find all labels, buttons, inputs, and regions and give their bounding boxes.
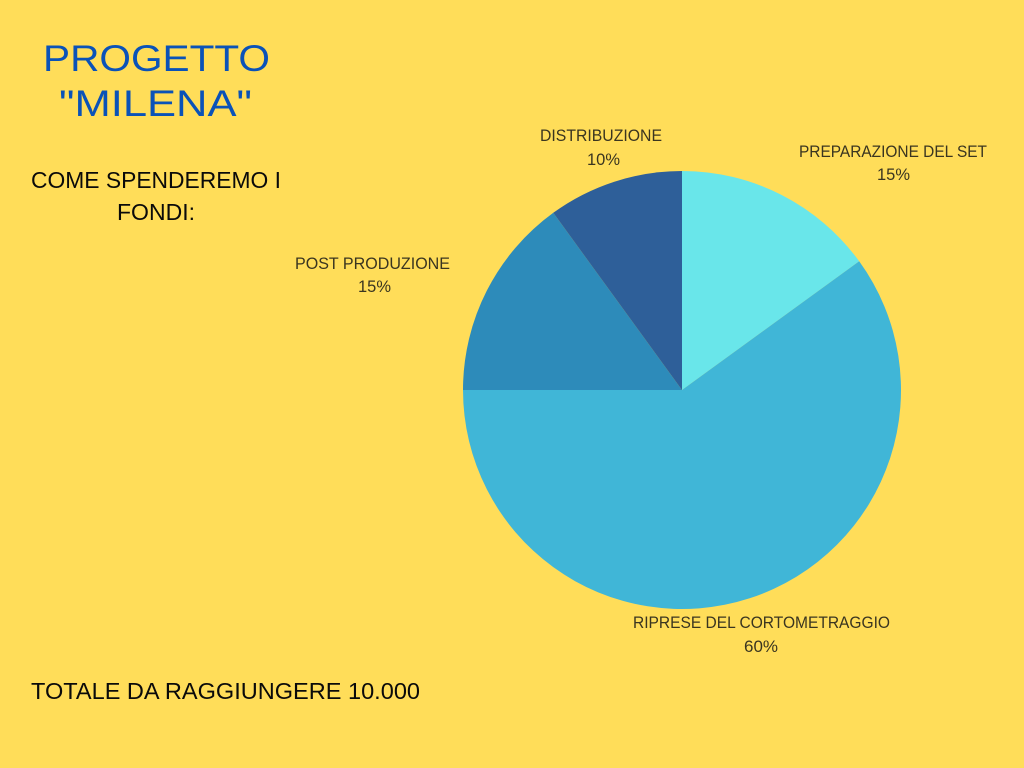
pie chart (463, 171, 901, 609)
subtitle: how the funds will be spent: FONDI: (117, 199, 195, 225)
label: riprese del cortometraggio: RIPRESE DEL CORTOMETRAGGIO (633, 614, 890, 632)
label: post produzione (295, 255, 450, 296)
label: riprese del cortometraggio (633, 614, 890, 656)
label: preparazione del set: 15% (877, 166, 910, 184)
slice: riprese del cortometraggio 60% (463, 261, 901, 609)
title (43, 37, 270, 124)
total to raise: TOTALE DA RAGGIUNGERE 10.000 (31, 678, 420, 704)
label: preparazione del set: PREPARAZIONE DEL SET (799, 143, 987, 161)
subtitle: how the funds will be spent: COME SPENDEREMO I (31, 167, 281, 193)
label: distribuzione (540, 127, 662, 169)
slice: distribuzione 10% (553, 171, 682, 390)
title: PROGETTO (43, 37, 270, 79)
title: "MILENA" (59, 82, 252, 124)
label: distribuzione: 10% (587, 151, 620, 169)
slice: preparazione del set 15% (682, 171, 859, 390)
label: preparazione del set (799, 143, 987, 184)
label: distribuzione: DISTRIBUZIONE (540, 127, 662, 145)
label: post produzione: POST PRODUZIONE (295, 255, 450, 273)
slice: post produzione 15% (463, 213, 682, 390)
label: riprese del cortometraggio: 60% (744, 638, 778, 656)
subtitle: how the funds will be spent (31, 167, 281, 225)
label: post produzione: 15% (358, 278, 391, 296)
